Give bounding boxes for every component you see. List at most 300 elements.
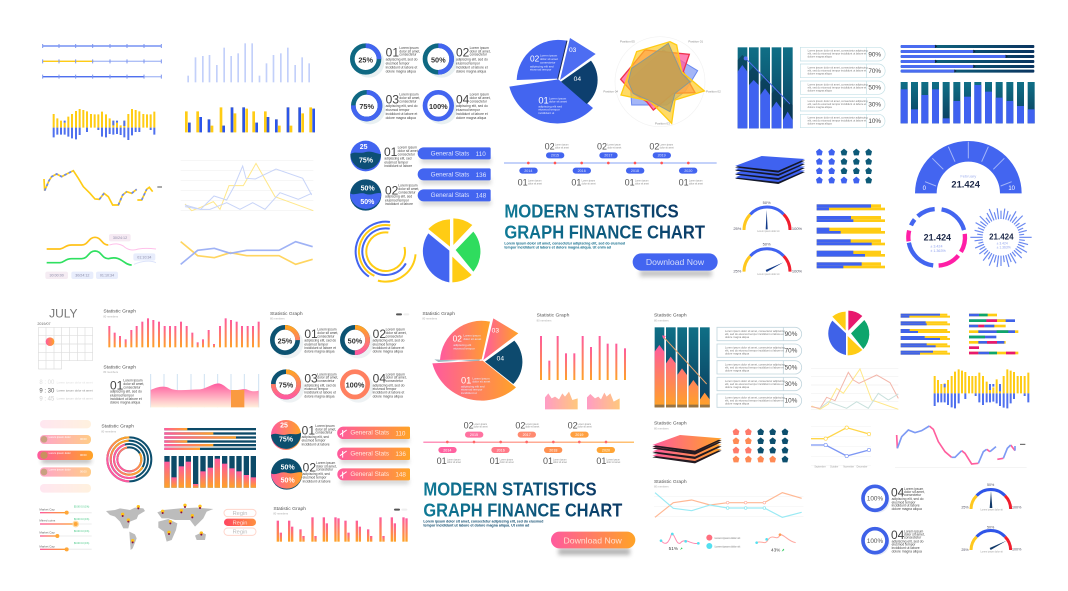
blue donuts: eiusmod tempor xyxy=(892,543,916,547)
general stats pills: General Stats xyxy=(431,171,469,178)
donut labels: dolore magna aliqua xyxy=(456,69,486,73)
donut labels: adipiscing elit, sed do xyxy=(456,57,488,61)
percent boxes: dolore magna aliqua xyxy=(808,71,832,75)
heading: 80 members xyxy=(654,318,669,322)
stat circles: 50% xyxy=(361,186,375,193)
donut labels: eiusmod tempor xyxy=(373,387,397,391)
download button: Download Now xyxy=(564,535,623,545)
donut labels: dolore magna aliqua xyxy=(304,350,335,354)
horizontal stacked bars xyxy=(901,314,950,355)
donut labels: 25% xyxy=(358,55,373,64)
percent boxes: dolore magna aliqua xyxy=(808,105,832,109)
donut labels: 03 xyxy=(386,92,399,106)
donut labels: Lorem ipsum xyxy=(386,372,405,376)
heading: 80 members xyxy=(270,317,285,321)
heading: 80 members xyxy=(537,318,552,322)
blue donuts: 04 xyxy=(891,486,905,500)
title xyxy=(423,478,622,527)
donut labels: adipiscing elit, sed do xyxy=(304,339,336,343)
heading: Statistic Graph xyxy=(270,311,303,317)
timeline: 2019 xyxy=(575,433,583,437)
descending columns xyxy=(738,47,793,128)
stat circles: incididunt ut labore xyxy=(385,202,413,206)
price line xyxy=(44,171,162,205)
pink donuts xyxy=(272,327,373,403)
timeline: dolor sit amet xyxy=(474,426,488,429)
paired yellow and blue bars xyxy=(185,107,315,132)
percent boxes: elit, sed do eiusmod tempor incididunt ut labore et xyxy=(808,52,867,56)
timeline: 01 xyxy=(518,177,528,187)
donut labels: dolor sit amet, xyxy=(399,96,420,100)
region buttons: Regin xyxy=(233,511,247,517)
exploded gradient pie: adipiscing elit xyxy=(453,343,471,347)
heading xyxy=(273,506,407,516)
timeline: 02 xyxy=(568,421,578,431)
area chart: Lorem ipsum xyxy=(123,379,143,383)
blue donuts: dolor sit amet, xyxy=(904,490,925,494)
stat circles: 02 xyxy=(385,183,399,197)
small gauges: 25% xyxy=(733,226,742,231)
title: MODERN STATISTICS xyxy=(423,478,597,499)
download button xyxy=(551,532,635,555)
donut labels: eiusmod tempor xyxy=(304,342,329,346)
stat circles: consectetur xyxy=(398,190,416,194)
general stats pills: 110 xyxy=(395,430,406,437)
donut labels xyxy=(278,327,407,398)
small sparkline 43%: 43% xyxy=(771,548,780,553)
general stats pills xyxy=(337,427,410,484)
panel: top-center donuts, pies and title xyxy=(344,37,721,293)
donut labels: 75% xyxy=(359,102,374,111)
donut labels: 01 xyxy=(304,327,318,341)
heading: 80 members xyxy=(422,317,438,321)
title: Lorem ipsum dolor sit amet, consectetur adipiscing elit, sed do eiusmod xyxy=(423,518,544,523)
gradient menu buttons: 00:00 xyxy=(80,453,87,457)
donut row: percent rings xyxy=(352,46,457,124)
calendar: JULY xyxy=(49,306,78,320)
multi-line chart xyxy=(811,368,898,409)
exploded blue pie: 02 xyxy=(530,54,540,64)
small gauges: 25% xyxy=(733,268,742,273)
donut labels: Lorem ipsum xyxy=(386,328,405,332)
stat circles: incididunt ut labore xyxy=(303,479,331,483)
heading xyxy=(103,364,136,374)
pink bar chart xyxy=(108,318,260,347)
timeline: 2016 xyxy=(497,448,505,452)
exploded blue pie: consectetur xyxy=(540,60,555,64)
donut labels: 02 xyxy=(456,46,470,60)
general stats pills: General Stats xyxy=(431,150,469,157)
general stats pills: General Stats xyxy=(431,192,469,199)
stat circles: 50% xyxy=(281,478,295,485)
world map xyxy=(106,504,213,550)
market cap sliders: $0.00 0.0 (1%) xyxy=(74,519,89,521)
blue donuts: adipiscing elit, sed do xyxy=(892,539,924,543)
percent boxes: dolore magna aliqua xyxy=(725,402,750,406)
donut labels: Lorem ipsum xyxy=(399,46,419,50)
heading xyxy=(654,313,687,322)
panel: bottom-left calendar and pink charts xyxy=(37,306,410,551)
blue donuts: adipiscing elit, sed do xyxy=(892,497,924,501)
region buttons: Regin xyxy=(233,520,247,526)
gradient menu buttons: Lorem ipsum dolor xyxy=(49,435,71,439)
heading: Statistic Graph xyxy=(654,479,687,485)
timeline: Lorem ipsum xyxy=(606,458,620,461)
region buttons xyxy=(224,509,256,536)
market cap sliders: Market Cap xyxy=(39,544,55,548)
small sparkline 43% xyxy=(715,533,796,553)
area chart: eiusmod tempor xyxy=(110,393,135,397)
stat circles: 25 xyxy=(360,144,368,151)
percent boxes: 50% xyxy=(785,364,798,371)
timeline: dolor sit amet xyxy=(553,461,567,464)
timeline: dolor sit amet xyxy=(607,146,622,149)
stat circles: 50% xyxy=(281,465,295,472)
donut labels: dolore magna aliqua xyxy=(456,116,486,120)
percent boxes: Lorem ipsum dolor sit amet, consectetur adipiscing xyxy=(808,65,868,69)
stacked layers xyxy=(735,156,805,184)
pentagon grid xyxy=(733,428,788,462)
panel: top-right columns, gauges and rings xyxy=(733,45,1035,277)
stat circles: dolor sit amet, xyxy=(315,427,336,431)
exploded gradient pie: dolor sit amet xyxy=(472,380,490,384)
donut labels: 03 xyxy=(304,372,318,386)
donut labels: incididunt ut labore et xyxy=(386,65,417,69)
stat circles: adipiscing elit, sed xyxy=(303,472,330,476)
donut labels: 04 xyxy=(456,92,470,106)
donut labels xyxy=(358,46,491,120)
stat circles: 02 xyxy=(303,460,316,474)
date tags: 30/24:12 xyxy=(75,274,89,278)
sparkline legend: Lorem ipsum dolor sit xyxy=(714,536,740,540)
stat circles: adipiscing elit, sed xyxy=(302,435,329,439)
percent boxes: dolore magna aliqua xyxy=(725,368,750,372)
timeline xyxy=(504,141,717,187)
download button: Download Now xyxy=(646,257,705,267)
timeline: 01 xyxy=(571,177,581,187)
large semicircle gauge: February xyxy=(960,174,976,179)
small gauges: 100% xyxy=(792,226,803,231)
general stats pills: 136 xyxy=(395,451,406,458)
timeline: 02 xyxy=(597,141,607,151)
yellow and blue line chart xyxy=(181,242,313,264)
timeline: 2015 xyxy=(551,154,559,158)
exploded gradient pie: 01 xyxy=(461,375,471,385)
percent boxes: elit, sed do eiusmod tempor incididunt ut labore et xyxy=(725,399,784,403)
radar chart: Position 04 xyxy=(603,89,618,93)
stat circles: dolor sit amet, xyxy=(398,149,419,153)
percent boxes: elit, sed do eiusmod tempor incididunt ut labore et xyxy=(808,102,867,106)
exploded blue pie: dolor sit amet xyxy=(540,57,558,61)
stat circles: eiusmod tempor xyxy=(302,439,326,443)
price line xyxy=(895,426,1027,468)
exploded gradient pie: eiusmod tempor xyxy=(461,388,482,392)
yellow and blue line chart: December xyxy=(857,466,868,469)
blue donuts xyxy=(863,486,925,555)
general stats pills: 136 xyxy=(476,172,487,179)
date tags: 30/24:12 xyxy=(113,236,127,240)
title: MODERN STATISTICS xyxy=(504,201,679,222)
time list: Lorem ipsum dolor sit amet xyxy=(57,389,93,393)
percent boxes: Lorem ipsum dolor sit amet, consectetur adipiscing xyxy=(725,362,785,366)
exploded blue pie: 04 xyxy=(574,76,581,83)
gradient menu buttons: 00:00 xyxy=(80,470,87,474)
heading xyxy=(654,479,687,489)
horizontal stacked bars xyxy=(817,204,885,268)
percent boxes: elit, sed do eiusmod tempor incididunt ut labore et xyxy=(808,119,867,123)
stat circles: adipiscing elit, sed xyxy=(384,157,412,161)
exploded gradient pie: dolor sit amet xyxy=(463,337,481,341)
sparkline legend xyxy=(706,535,740,549)
panel: bottom-right charts and gauges xyxy=(654,311,1029,555)
percent boxes xyxy=(800,47,885,128)
small gauges: Lorem ipsum dolor sit xyxy=(757,273,780,276)
pink and cyan line chart xyxy=(654,493,803,517)
market cap sliders: $0.00 0.0 (1%) xyxy=(74,531,89,533)
region buttons: Regin xyxy=(233,530,247,536)
general stats pills: 148 xyxy=(476,193,487,200)
stat circles: eiusmod tempor xyxy=(303,476,327,480)
percent boxes: dolore magna aliqua xyxy=(808,55,832,59)
donut labels: adipiscing elit, sed do xyxy=(386,104,418,108)
heading xyxy=(270,311,409,321)
blue donuts: 100% xyxy=(867,496,883,503)
heading: 80 members xyxy=(654,485,669,489)
timeline: 01 xyxy=(490,456,500,466)
timeline: 01 xyxy=(596,456,606,466)
large semicircle gauge xyxy=(915,141,1022,193)
small gauges: 100% xyxy=(1012,506,1022,510)
small sparkline 43%: Lorem ipsum dolor sit xyxy=(715,536,741,540)
radar chart xyxy=(603,37,721,127)
timeline: 2015 xyxy=(470,433,478,437)
donut labels: incididunt ut labore et xyxy=(456,65,488,69)
stacked layers xyxy=(652,435,722,463)
exploded gradient pie: Lorem ipsum xyxy=(463,334,481,338)
multi-line chart xyxy=(181,161,313,211)
timeline: 02 xyxy=(649,141,659,151)
small gauges: 50% xyxy=(763,200,771,205)
timeline: dolor sit amet xyxy=(500,461,514,464)
heading: 80 members xyxy=(103,370,119,374)
exploded blue pie: eiusmod tempor xyxy=(530,68,551,72)
heading xyxy=(537,313,570,322)
donut labels: 50% xyxy=(348,336,363,345)
exploded gradient pie: eiusmod tempor xyxy=(453,346,475,350)
descending columns xyxy=(655,327,710,407)
donut labels: 25% xyxy=(278,336,293,345)
title: tempor incididunt ut labore et dolore magna aliqua. Ut enim ad xyxy=(504,244,611,249)
small gauges: 25% xyxy=(961,506,969,510)
timeline: 02 xyxy=(515,421,525,431)
market cap sliders xyxy=(39,507,92,551)
general stats pills: General Stats xyxy=(350,471,389,478)
donut labels: incididunt ut labore et xyxy=(386,112,417,116)
donut labels: incididunt ut labore et xyxy=(304,346,336,350)
heading: 80 members xyxy=(273,512,289,516)
stat circles: incididunt ut labore xyxy=(384,164,412,168)
exploded blue pie xyxy=(509,38,598,124)
timeline: dolor sit amet xyxy=(635,182,649,185)
donut labels: Lorem ipsum xyxy=(399,93,419,97)
diverging yellow and blue bars xyxy=(53,109,155,140)
heading: Statistic Graph xyxy=(654,421,687,427)
donut labels: consectetur xyxy=(399,53,417,57)
area chart: consectetur xyxy=(123,385,141,389)
donut labels: dolore magna aliqua xyxy=(304,394,335,398)
stat circles: dolor sit amet, xyxy=(316,464,337,468)
radial sunburst: 21.424 xyxy=(989,232,1014,241)
stat circles: 75% xyxy=(279,437,294,444)
blue donuts: incididunt ut labore xyxy=(892,546,920,550)
percent boxes: 50% xyxy=(868,85,881,92)
area chart: adipiscing elit, sed do xyxy=(110,390,142,394)
exploded gradient pie: Lorem ipsum xyxy=(472,376,490,380)
donut labels: Lorem ipsum xyxy=(470,93,489,97)
donut labels: incididunt ut labore et xyxy=(373,346,404,350)
donut labels: adipiscing elit, sed do xyxy=(373,339,405,343)
donut labels: eiusmod tempor xyxy=(456,108,481,112)
progress bars xyxy=(901,45,1034,73)
radial sunburst xyxy=(970,208,1032,267)
gradient bars xyxy=(540,336,626,380)
stat circles: Lorem ipsum xyxy=(398,184,418,188)
percent boxes: Lorem ipsum dolor sit amet, consectetur adipiscing xyxy=(725,329,785,333)
yellow and blue line chart: October xyxy=(830,466,839,469)
radar chart: Position 05 xyxy=(620,39,635,43)
percent boxes: dolore magna aliqua xyxy=(725,335,750,339)
donut labels: consectetur xyxy=(399,99,417,103)
percent boxes: elit, sed do eiusmod tempor incididunt ut labore et xyxy=(725,382,784,386)
stat circles: 01 xyxy=(384,145,398,159)
timeline: dolor sit amet xyxy=(528,182,542,185)
date tags: 01:10:34 xyxy=(137,255,151,259)
pentagon grid xyxy=(816,149,872,183)
smooth yellow green pink lines xyxy=(47,237,156,265)
percent boxes: Lorem ipsum dolor sit amet, consectetur adipiscing xyxy=(808,82,868,86)
donut labels: 04 xyxy=(373,372,386,386)
heading: 80 members xyxy=(101,429,117,433)
time list: Lorem ipsum dolor sit amet xyxy=(57,397,93,401)
market cap sliders: Market Cap xyxy=(39,508,55,512)
segmented ring xyxy=(897,197,977,277)
donut labels: eiusmod tempor xyxy=(373,342,397,346)
download button xyxy=(633,253,718,277)
donut labels: eiusmod tempor xyxy=(386,108,410,112)
blue donuts: consectetur xyxy=(904,535,922,539)
stacked columns xyxy=(164,456,256,488)
donut labels: consectetur xyxy=(386,334,404,338)
timeline: dolor sit amet xyxy=(689,182,703,185)
small gauges: 100% xyxy=(1012,548,1022,552)
timeline: 2020 xyxy=(602,448,610,452)
stat circles: 75% xyxy=(359,158,374,165)
donut labels: consectetur xyxy=(317,334,335,338)
exploded blue pie: incididunt ut xyxy=(538,111,554,115)
donut labels: dolor sit amet, xyxy=(399,49,420,53)
progress bars xyxy=(164,428,256,450)
timeline: Lorem ipsum xyxy=(689,180,703,183)
slider timelines xyxy=(43,44,161,79)
gradient menu buttons: Lorem ipsum dolor xyxy=(49,451,71,455)
percent boxes: 10% xyxy=(785,398,798,405)
exploded gradient pie: 02 xyxy=(453,334,462,344)
donut labels: consectetur xyxy=(470,53,488,57)
percent boxes: Lorem ipsum dolor sit amet, consectetur adipiscing xyxy=(808,99,868,103)
exploded gradient pie: 04 xyxy=(497,356,504,363)
timeline: 01 xyxy=(625,177,635,187)
stat circles xyxy=(271,420,337,490)
small gauges xyxy=(961,483,1022,553)
heading: Statistic Graph xyxy=(422,311,455,317)
general stats pills: 148 xyxy=(395,472,406,479)
pie chart xyxy=(828,311,869,355)
radar chart: Position 03 xyxy=(655,121,670,125)
heading: Statistic Graph xyxy=(103,309,136,315)
exploded gradient pie xyxy=(432,318,522,401)
blue donuts: Lorem ipsum xyxy=(904,487,923,491)
timeline: 2018 xyxy=(631,169,639,173)
date tags: 30:00:00 xyxy=(50,274,64,278)
percent boxes: 90% xyxy=(785,331,798,338)
timeline: 2020 xyxy=(684,169,692,173)
donut labels: adipiscing elit, sed do xyxy=(304,383,336,387)
donut labels: dolor sit amet, xyxy=(470,49,491,53)
percent boxes: elit, sed do eiusmod tempor incididunt ut labore et xyxy=(808,68,867,72)
heading: Statistic Graph xyxy=(537,313,570,319)
area chart: dolor sit amet, xyxy=(123,382,144,386)
percent boxes: Lorem ipsum dolor sit amet, consectetur adipiscing xyxy=(725,396,785,400)
time list: 9 : 45 xyxy=(39,396,55,402)
segmented pie xyxy=(423,218,480,282)
timeline: Lorem ipsum xyxy=(553,458,567,461)
percent boxes xyxy=(717,327,802,407)
pale bar chart xyxy=(187,43,310,82)
gradient menu buttons: Lorem ipsum dolor xyxy=(49,468,71,472)
small sparkline 51% xyxy=(660,533,700,551)
donut labels: dolor sit amet, xyxy=(386,331,407,335)
market cap sliders: $0.00 0.0 (1%) xyxy=(74,543,89,545)
small sparkline 51%: 51% xyxy=(669,546,678,551)
area chart: dolore magna aliqua xyxy=(110,401,140,405)
stacked columns xyxy=(901,82,1035,123)
large semicircle gauge: 10 xyxy=(1008,186,1016,192)
gradient menu buttons xyxy=(37,420,93,493)
time list xyxy=(39,380,93,402)
gradient menu buttons: 00:00 xyxy=(80,437,87,441)
stat circles: consectetur xyxy=(315,431,333,435)
heading: 80 members xyxy=(654,426,669,430)
small gauges: 50% xyxy=(987,483,995,487)
percent boxes: dolore magna aliqua xyxy=(725,352,750,356)
donut labels: 01 xyxy=(386,46,399,60)
blue donuts: 04 xyxy=(891,528,905,542)
donut labels: eiusmod tempor xyxy=(386,61,410,65)
stat circles xyxy=(350,141,419,211)
timeline: 01 xyxy=(437,456,447,466)
yellow and blue line chart xyxy=(811,426,871,469)
donut labels: eiusmod tempor xyxy=(304,387,329,391)
stat circles: eiusmod tempor xyxy=(384,160,409,164)
general stats pills: General Stats xyxy=(350,450,389,457)
small gauges: Lorem ipsum dolor sit xyxy=(981,550,1003,553)
stat circles: dolor sit amet, xyxy=(398,187,419,191)
blue donuts: eiusmod tempor xyxy=(892,500,916,504)
radar chart: Position 02 xyxy=(706,89,721,93)
exploded blue pie: Lorem ipsum xyxy=(549,96,567,100)
timeline: Lorem ipsum xyxy=(528,180,542,183)
large semicircle gauge: 21.424 xyxy=(951,179,981,189)
